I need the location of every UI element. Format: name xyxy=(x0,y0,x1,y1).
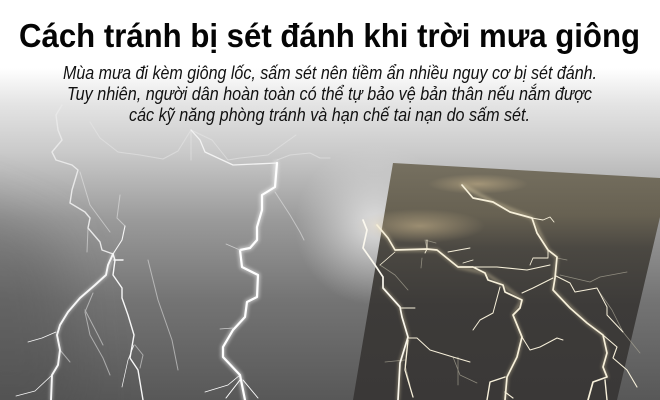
lightning bolts: left photo xyxy=(16,105,330,400)
bright bolts xyxy=(363,185,637,400)
center bolt xyxy=(191,130,277,400)
bolt A xyxy=(462,185,607,400)
faint bolt branches xyxy=(60,122,330,375)
thin dim branches xyxy=(380,240,640,385)
title: Cách tránh bị sét đánh khi trời mưa giông xyxy=(19,17,640,54)
tilted photo panel xyxy=(353,163,660,400)
glow xyxy=(377,185,607,400)
panel lightning xyxy=(363,185,640,400)
left bolt glow xyxy=(51,163,276,400)
bolt B xyxy=(377,225,522,400)
intro text xyxy=(63,62,597,125)
bolt C xyxy=(363,220,408,400)
left forked bolt xyxy=(16,105,143,400)
intro text: các kỹ năng phòng tránh và hạn chế tai nạn do sấm sét. xyxy=(129,104,530,125)
intro text: Tuy nhiên, người dân hoàn toàn có thể tự bảo vệ bản thân nếu nắm được xyxy=(67,83,593,104)
